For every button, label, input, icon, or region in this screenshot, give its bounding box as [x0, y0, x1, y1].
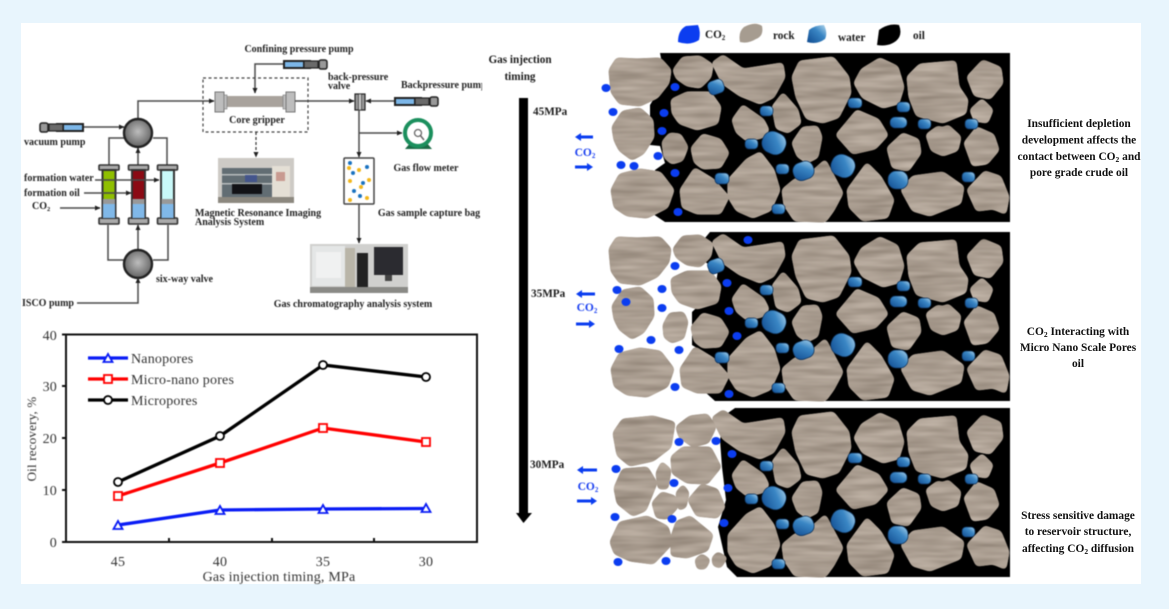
CO2 flow arrows: 2	[592, 152, 596, 160]
icon: lower six-way valve	[124, 250, 152, 278]
text: confining pressure pump: Confining pressure pump	[244, 44, 354, 55]
text: vacuum pump: vacuum pump	[24, 137, 86, 148]
chart legend: Micropores	[131, 394, 198, 409]
chart legend: Nanopores	[131, 352, 193, 367]
text: 45 MPa caption: and	[1119, 151, 1141, 163]
legend item: oil: oil	[913, 30, 925, 42]
text: 30MPa: 30MPa	[530, 459, 565, 471]
oil-saturated zone	[692, 232, 1010, 401]
image: MRI system	[218, 158, 294, 203]
legend item: CO2	[678, 25, 726, 44]
text: 30 MPa caption: affecting CO	[1022, 543, 1135, 556]
legend item: water: water	[838, 32, 865, 44]
arrow: CO2	[60, 207, 100, 209]
arrow: backpressure pump to valve	[366, 100, 394, 102]
legend item: rock: rock	[773, 30, 795, 42]
arrow: formation oil	[84, 192, 131, 194]
text: ISCO pump: ISCO pump	[22, 298, 74, 309]
chart legend	[88, 352, 234, 409]
chart legend: Micro-nano pores	[131, 373, 234, 388]
text: 35 MPa caption: CO	[1027, 326, 1130, 339]
text: core gripper: Core gripper	[229, 115, 285, 126]
y axis tick labels: 10	[43, 484, 57, 499]
text: gas sample capture bag: Gas sample capture bag	[378, 208, 480, 219]
CO2 droplets	[602, 83, 682, 216]
text: formation oil: formation oil	[24, 188, 80, 199]
legend item: CO2: 2	[722, 34, 726, 42]
arrow: top valve to core	[138, 101, 214, 120]
series: nanopores	[114, 504, 430, 529]
icon: core gripper	[215, 92, 295, 112]
CO2 flow arrows: CO	[577, 302, 594, 314]
text: 35 MPa caption: Micro Nano Scale Pores	[1020, 342, 1137, 354]
arrow: pressure decline	[516, 98, 532, 523]
text: 30 MPa caption: Stress sensitive damage	[1021, 510, 1135, 522]
text: backpressure pump: Backpressure pump	[401, 80, 487, 91]
oil-saturated zone	[718, 408, 1010, 577]
text: 45 MPa caption: contact between CO	[1017, 151, 1141, 164]
chart: oil recovery vs gas injection timing	[24, 329, 477, 585]
icon: confining pressure pump	[283, 60, 327, 69]
panel: 30 MPa pore model	[577, 408, 1010, 577]
arrow: confining pump to core	[255, 64, 283, 93]
text: 30 MPa caption: diffusion	[1088, 543, 1135, 555]
x axis tick labels	[111, 555, 433, 570]
CO2 flow arrows: 2	[595, 486, 599, 494]
x axis tick labels: 35	[316, 555, 330, 570]
text: 35MPa: 35MPa	[531, 288, 566, 300]
icon: vacuum pump	[40, 123, 84, 132]
arrow: bag to chromatography	[358, 204, 360, 243]
legend: pore components	[678, 24, 925, 46]
icon: back-pressure valve	[355, 94, 365, 110]
CO2 droplets	[610, 437, 736, 566]
panel: experimental schematic	[22, 44, 487, 310]
water droplets	[706, 78, 978, 214]
text: MRI system: Analysis System	[195, 217, 265, 228]
text: gas chromatography analysis system: Gas chromatography analysis system	[274, 299, 433, 310]
panel: 35 MPa pore model	[576, 232, 1010, 401]
chart axes	[62, 334, 477, 542]
text: 45 MPa caption: Insufficient depletion	[1027, 118, 1131, 130]
water droplets	[706, 257, 978, 393]
text: 45 MPa caption: 2	[1116, 155, 1120, 164]
arrows: lower valve to cylinders	[108, 225, 168, 260]
arrow: ISCO pump	[77, 278, 138, 303]
text: gas injection timing: Gas injection	[488, 54, 552, 66]
legend item: water	[807, 25, 865, 44]
text: MRI system: Magnetic Resonance Imaging	[195, 208, 321, 219]
water droplets	[745, 453, 978, 569]
arrow: formation water	[95, 179, 159, 181]
y axis tick labels: 20	[43, 432, 57, 447]
text: 35 MPa caption: 2	[1044, 330, 1048, 339]
y axis tick labels	[43, 329, 57, 551]
arrow: vacuum pump to valve	[84, 126, 124, 128]
image: gas chromatography system	[310, 244, 408, 293]
y axis tick labels: 30	[43, 380, 57, 395]
rocks	[610, 235, 1008, 400]
text: gas injection timing: timing	[504, 71, 536, 83]
arrow: core to back-pressure valve	[295, 100, 354, 102]
text: formation water: formation water	[24, 173, 94, 184]
x axis title: Gas injection timing, MPa	[203, 570, 356, 585]
y axis tick labels: 40	[43, 329, 57, 344]
CO2 flow arrows	[575, 133, 596, 171]
icon: gas flow meter	[405, 120, 432, 149]
icon: backpressure pump	[394, 97, 438, 106]
text: gas flow meter: Gas flow meter	[394, 163, 459, 174]
oil-saturated zone	[650, 53, 1010, 222]
panel: injection timing axis	[488, 54, 568, 523]
text: 45MPa: 45MPa	[533, 106, 568, 118]
text: six-way valve: six-way valve	[156, 274, 214, 285]
arrow: dashed core to MRI	[255, 132, 257, 157]
arrows: cylinders to top valve	[109, 138, 167, 165]
legend item: CO2: CO	[705, 29, 722, 41]
y axis tick labels: 0	[50, 536, 57, 551]
rocks	[611, 411, 1008, 576]
text: back-pressure valve: valve	[328, 81, 351, 92]
icon: gas sample capture bag	[344, 158, 374, 204]
series: micropores	[114, 361, 430, 486]
cylinder: formation oil	[128, 165, 148, 224]
x axis tick labels: 30	[419, 555, 433, 570]
text: 30 MPa caption: 2	[1084, 547, 1088, 556]
panel: 45 MPa pore model	[575, 53, 1010, 222]
cylinder: formation water	[99, 165, 119, 224]
rocks	[610, 56, 1008, 221]
series: micro-nano pores	[114, 424, 430, 500]
text: CO2: 2	[47, 206, 50, 213]
cylinder: CO2	[158, 165, 178, 224]
x axis tick labels: 40	[213, 555, 227, 570]
CO2 flow arrows: CO	[575, 147, 592, 159]
text: 30 MPa caption: to reservoir structure,	[1025, 526, 1131, 538]
x axis tick labels: 45	[111, 555, 125, 570]
icon: top six-way valve	[124, 119, 152, 147]
text: 45 MPa caption: development affects the	[1022, 134, 1136, 146]
CO2 flow arrows	[576, 290, 598, 328]
CO2 flow arrows	[577, 466, 599, 505]
text: CO2: CO	[32, 201, 47, 212]
CO2 flow arrows: CO	[578, 481, 595, 493]
text: 45 MPa caption: pore grade crude oil	[1030, 167, 1128, 179]
CO2 flow arrows: 2	[594, 307, 598, 315]
text: 35 MPa caption: oil	[1072, 358, 1084, 370]
arrow: valve to bag	[358, 110, 360, 157]
legend item: rock	[740, 24, 795, 43]
text: back-pressure valve: back-pressure	[328, 72, 388, 83]
arrow: valve to gas flow meter	[359, 132, 402, 134]
legend item: oil	[877, 25, 925, 46]
CO2 droplets	[612, 236, 752, 398]
y axis title: Oil recovery, %	[24, 397, 39, 481]
text: 35 MPa caption: Interacting with	[1048, 326, 1130, 338]
dashed box around core gripper	[203, 78, 308, 132]
